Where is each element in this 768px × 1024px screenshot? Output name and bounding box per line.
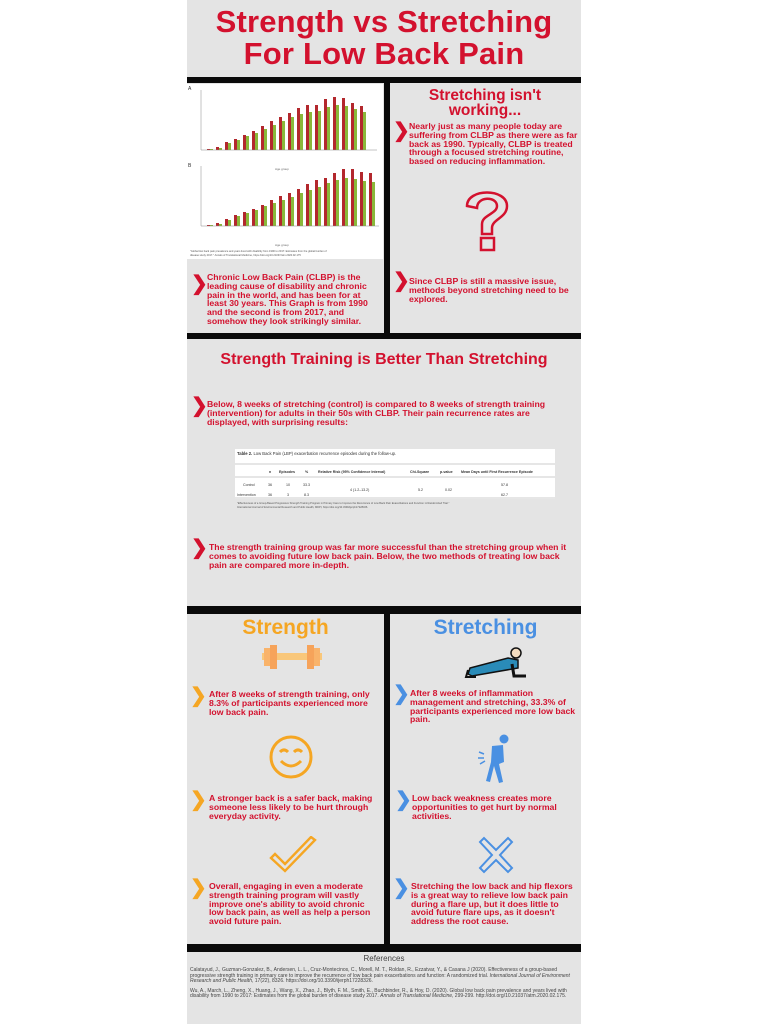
title: For Low Back Pain xyxy=(244,36,524,71)
text block: strength group successful: The strength training group was far more successful than the stretching group when it comes to avoiding future low back pain. Below, the two methods of treating low back pain are compared more in-depth. xyxy=(209,542,566,570)
text: low back weakness: ❯ xyxy=(395,789,412,811)
text block: below 8 weeks: ❯ xyxy=(191,395,208,417)
text: overall: Overall, engaging in even a moderate strength training program will vastly improve one's ability to avoid chronic low back pain, as well as help a person avoid future pain. xyxy=(209,881,370,926)
text: 8.3%: ❯ xyxy=(190,685,207,707)
icon: x xyxy=(478,836,514,874)
text: stretching relief: ❯ xyxy=(393,877,410,899)
table: recurrence episodes: % xyxy=(305,470,309,474)
text: stretching relief: Stretching the low back and hip flexors is a great way to relieve low back pain during a flare up, but it does little to avoid future flare ups, as it doesn't address the root cause. xyxy=(411,881,573,926)
table: recurrence episodes: Intervention xyxy=(237,493,256,497)
table: recurrence episodes: Table 2. Low Back Pain (LBP) exacerbation recurrence episodes during the follow-up. xyxy=(237,451,396,456)
references: Calatayud, J., Guzman-Gonzalez, B., Andersen, L. L., Cruz-Montecinos, C., Morell, M. T., Roldan, R., Ezzatvar, Y., & Casana J (2020). Effectiveness of a group-based progressive strength training in primary care to improve the recurrence of low back pain exacerbations and function: A randomized trial. International Journal of Environment Research and Public Health, 17(22), 8326. https://doi.org/10.3390/ijerph17228326. xyxy=(190,967,570,984)
heading: strength: Strength xyxy=(242,616,329,639)
panel: stretching xyxy=(393,616,575,926)
references xyxy=(190,954,570,999)
icon: smiley xyxy=(270,736,312,778)
title xyxy=(216,4,552,71)
text block: beyond stretching: ❯ xyxy=(393,270,410,292)
table: recurrence episodes: 33.3 xyxy=(303,483,310,487)
table: recurrence episodes: Control xyxy=(243,483,255,487)
table: recurrence episodes: International Journal of Environmental Research and Public Health, MDPI, https://doi.org/10.3390/ijerph17228326. xyxy=(237,505,368,509)
table: recurrence episodes: 36 xyxy=(268,483,272,487)
title: Strength vs Stretching xyxy=(216,4,552,39)
icon: question mark xyxy=(466,191,508,252)
table: recurrence episodes: 0.02 xyxy=(445,488,452,492)
text: 33.3%: After 8 weeks of inflammation management and stretching, 33.3% of participants experienced more low back pain. xyxy=(410,688,575,724)
table: recurrence episodes: 62.7 xyxy=(501,493,508,497)
table: recurrence episodes: Relative Risk (95% Confidence Interval) xyxy=(318,470,386,474)
table: recurrence episodes: p-value xyxy=(440,470,453,474)
text block: strength group successful: ❯ xyxy=(191,537,208,559)
text: stronger back: ❯ xyxy=(190,789,207,811)
table: recurrence episodes xyxy=(235,449,555,509)
text: 33.3%: ❯ xyxy=(393,683,410,705)
table: recurrence episodes: Episodes xyxy=(279,470,295,474)
heading: stretching isn't working: Stretching isn't working... xyxy=(429,87,541,119)
text: low back weakness: Low back weakness creates more opportunities to get hurt by normal activities. xyxy=(412,793,557,821)
table: recurrence episodes: 36 xyxy=(268,493,272,497)
table: recurrence episodes: 3 xyxy=(287,493,289,497)
chart: low back pain prevalence: "Global low back pain prevalence and years lived with disability from 1990 to 2017: Estimates from the global burden of xyxy=(190,249,327,253)
text block: CLBP: Chronic Low Back Pain (CLBP) is the leading cause of disability and chronic pain in the world, and has been for at least 30 years. This Graph is from 1990 and the second is from 2017, and somehow they look strikingly similar. xyxy=(207,272,368,326)
text: 8.3%: After 8 weeks of strength training, only 8.3% of participants experienced more low back pain. xyxy=(209,689,370,717)
table: recurrence episodes: "Effectiveness of a Group-Based Progressive Strength Training Program in Primary Care to Improve the Recurrence of Low Back Pain Exacerbations and Function: A Randomized Trial." xyxy=(237,501,449,505)
chart: low back pain prevalence: Age group xyxy=(275,243,289,247)
text block: stretching: Nearly just as many people today are suffering from CLBP as there were as far back as 1990. Typically, CLBP is treated through a focused stretching routine, based on reducing inflammation. xyxy=(409,121,577,166)
chart: low back pain prevalence: A xyxy=(188,86,192,92)
chart: low back pain prevalence: B xyxy=(188,163,192,169)
table: recurrence episodes: 5.2 xyxy=(418,488,423,492)
heading: stretching: Stretching xyxy=(434,616,537,639)
references: Wu, A., March, L., Zheng, X., Huang, J., Wang, X., Zhao, J., Blyth, F. M., Smith, E., Buchbinder, R., & Hoy, D. (2020). Global low back pain prevalence and years lived with disability from 1990 to 2017: Estimates from the global burden of disease study 2017. Annals of Translational Medicine, 299-299. http://doi.org/10.21037/atm.2020.02.175. xyxy=(190,988,567,999)
chart: low back pain prevalence xyxy=(187,84,383,259)
table: recurrence episodes: 4 (1.2–13.2) xyxy=(350,488,369,492)
text: overall: ❯ xyxy=(190,877,207,899)
icon: plank person xyxy=(464,647,526,678)
table: recurrence episodes: Chi-Square xyxy=(410,470,429,474)
table: recurrence episodes: 57.8 xyxy=(501,483,508,487)
references: References xyxy=(364,954,404,963)
table: recurrence episodes: 10 xyxy=(286,483,290,487)
icon: dumbbell xyxy=(262,645,322,669)
text block: CLBP: ❯ xyxy=(191,273,208,295)
icon: back pain person xyxy=(478,734,508,783)
text: stronger back: A stronger back is a safer back, making someone less likely to be hurt through everyday activity. xyxy=(209,793,372,821)
text block: beyond stretching: Since CLBP is still a massive issue, methods beyond stretching need to be explored. xyxy=(409,276,569,304)
text block: below 8 weeks: Below, 8 weeks of stretching (control) is compared to 8 weeks of strength training (intervention) for adults in their 50s with CLBP. Their pain recurrence rates are displayed, with surprising results: xyxy=(207,399,545,427)
panel: strength xyxy=(190,616,372,926)
icon: check xyxy=(269,836,317,873)
table: recurrence episodes: n xyxy=(269,470,271,474)
chart: low back pain prevalence: disease study 2017." Annals of Translational Medicine, https://doi.org/10.21037/atm.2020.02.175 xyxy=(190,253,301,257)
heading: strength training better: Strength Training is Better Than Stretching xyxy=(220,351,548,368)
text block: stretching: ❯ xyxy=(393,120,410,142)
table: recurrence episodes: 8.3 xyxy=(304,493,309,497)
table: recurrence episodes: Mean Days until First Recurrence Episode xyxy=(461,470,533,474)
chart: low back pain prevalence: Age group xyxy=(275,167,289,171)
